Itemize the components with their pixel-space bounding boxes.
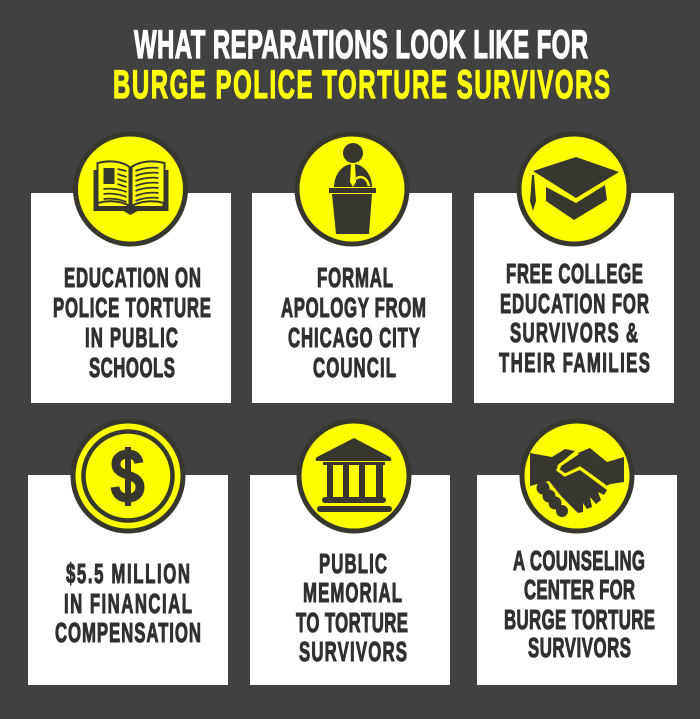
icon: handshake [522, 421, 632, 531]
card text: THEIR FAMILIES [499, 347, 650, 378]
panel: free college education [474, 134, 674, 403]
panel: public memorial [250, 421, 450, 685]
card text: IN PUBLIC [85, 322, 178, 353]
icon: graduation cap [519, 134, 629, 244]
card text: FORMAL [317, 262, 393, 293]
icon: dollar coin [73, 421, 183, 531]
card text: TO TORTURE [296, 607, 408, 638]
card text [281, 262, 426, 383]
title [113, 22, 610, 106]
card text: CENTER FOR [524, 574, 635, 605]
card text [55, 558, 201, 648]
card text: COUNCIL [313, 352, 396, 383]
panel: formal apology [252, 134, 452, 403]
card text: MEMORIAL [303, 577, 402, 608]
card text: COMPENSATION [55, 617, 201, 648]
card text [504, 545, 655, 663]
card text: APOLOGY FROM [281, 292, 426, 323]
panel: financial compensation [28, 421, 228, 685]
card text: SURVIVORS & [510, 317, 638, 348]
card text: SURVIVORS [528, 632, 631, 663]
card text: IN FINANCIAL [64, 588, 192, 619]
card text: POLICE TORTURE [53, 292, 211, 323]
card text: FREE COLLEGE [506, 258, 643, 289]
card text: $5.5 MILLION [66, 558, 190, 589]
icon: memorial building [299, 421, 409, 531]
card text: EDUCATION ON [64, 262, 201, 293]
panel: counseling center [477, 421, 677, 685]
card text: SURVIVORS [299, 636, 407, 667]
title: WHAT REPARATIONS LOOK LIKE FOR [134, 22, 588, 66]
card text: PUBLIC [319, 548, 387, 579]
card text: EDUCATION FOR [500, 288, 649, 319]
title: BURGE POLICE TORTURE SURVIVORS [113, 62, 610, 106]
card text: SCHOOLS [89, 352, 175, 383]
card text [499, 258, 650, 378]
panel: education on police torture [31, 134, 231, 403]
card text [296, 548, 408, 667]
card text [53, 262, 211, 383]
card text: A COUNSELING [513, 545, 645, 576]
icon: open book [76, 134, 186, 244]
icon: speaker at podium [297, 134, 407, 244]
card text: BURGE TORTURE [504, 604, 655, 635]
card text: CHICAGO CITY [288, 322, 420, 353]
